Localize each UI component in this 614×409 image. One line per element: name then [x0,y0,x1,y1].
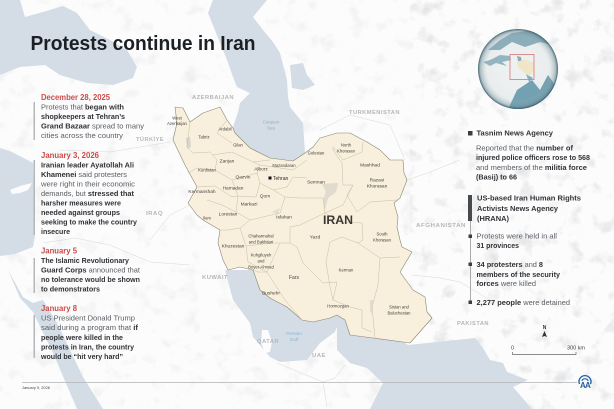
timeline entry: January 8 [34,304,139,361]
panel: HRANA: (HRANA) [477,214,509,223]
timeline entry: January 3, 2026 [34,151,138,236]
province labels: Kohgiluyeh [251,252,272,258]
timeline entry: January 8: protests in Iran, the country [41,342,135,352]
fact: killed [468,260,561,288]
panel: Tasnim News Agency [468,128,590,182]
timeline entry: January 5: to demonstrators [41,284,100,294]
panel: Tasnim News Agency: Reported that the number of [476,144,574,152]
timeline entry: January 8: said during a program that if [41,323,139,332]
fact: provinces: Protests were held in all [476,232,557,240]
province labels: Mazandaran [272,163,296,168]
province labels: Khuzestan [222,244,245,250]
title: Protests continue in Iran [30,33,256,55]
province labels: Hamadan [223,186,244,192]
Iran landmass [173,107,432,343]
province labels: Mashhad [360,162,380,168]
timeline entry: January 5: The Islamic Revolutionary [41,256,130,265]
heading bar [468,195,472,221]
water: Red Sea [8,270,103,409]
province labels: and [258,258,265,264]
footer rule [22,381,577,384]
water: Black Sea [0,0,137,85]
north arrow: N [543,325,547,331]
timeline entry: December 28, 2025: Protests that began with [41,102,124,112]
globe locator box [510,54,534,80]
water: Persian Gulf and Gulf of Oman [225,270,532,409]
timeline entry: December 28, 2025: Grand Bazaar spread to many [41,122,144,130]
timeline entry: January 3, 2026: Iranian leader Ayatollah Ali [41,160,134,170]
country label: Iran: IRAN [323,213,353,227]
timeline entry: January 3, 2026: needed against groups [41,208,120,217]
timeline entry: January 3, 2026: insecure [41,227,70,236]
timeline entry: January 5: January 5 [41,246,78,256]
neighbouring country labels: TÜRKİYE [136,136,164,143]
province labels: Kerman [339,268,354,272]
panel: HRANA [468,194,581,307]
locator globe [478,29,560,114]
province labels: West [172,116,183,120]
province labels: Fars [289,275,300,281]
province labels: Ardabil [218,126,232,132]
neighbouring country labels: UAE [312,353,326,359]
timeline entry: December 28, 2025: shopkeepers at Tehran’s [41,112,125,121]
water label: Caspian Sea: Caspian [263,120,280,124]
terrain patches [186,137,373,313]
scale bar: 300 km [567,346,585,352]
province borders [187,120,400,338]
province labels: Razavi [370,178,384,184]
province labels: Baluchestan [387,310,411,316]
fact: provinces [468,232,557,250]
neighbouring country labels: AZERBAIJAN [192,95,234,101]
timeline entry: January 8: would be “hit very hard” [40,352,123,361]
panel: HRANA: Activists News Agency [477,204,559,213]
province labels: Qom [260,194,270,200]
timeline entry: January 3, 2026: seeking to make the country [41,218,138,226]
timeline entry: January 8: people were killed in the [41,333,123,342]
province labels [167,116,411,316]
province labels: Sistan and [389,304,410,310]
timeline entry: January 3, 2026: demands, but stressed that [41,189,135,198]
province labels: South [377,232,388,236]
province labels: Chaharmahal [248,234,274,238]
panel: timeline [34,93,144,361]
date: January 9, 2026 [22,385,50,390]
timeline entry: January 3, 2026: Khamenei said protesters [41,170,127,179]
map: Iran [167,107,432,343]
water: Caspian Sea [208,0,305,165]
province labels: Khorasan [367,184,388,190]
globe shading [478,29,558,109]
water label: Persian Gulf: Gulf [290,337,299,342]
province labels: Markazi [241,202,257,208]
timeline entry: December 28, 2025 [34,93,144,140]
province labels: North [341,142,352,148]
logo: AA: AA [580,381,591,390]
timeline entry: December 28, 2025: December 28, 2025 [41,93,111,102]
globe sea areas [509,75,554,109]
fact: killed: members of the security [476,270,561,279]
panel: Tasnim News Agency: and members of the militia force [476,163,587,172]
capital marker: Tehran: Tehran [273,176,289,182]
province labels: Qazvin [236,174,251,180]
fact: killed: 34 protesters and 8 [476,260,543,269]
province labels: Kermanshah [188,189,216,195]
province labels: Semnan [307,180,325,186]
scale bar: 0 [511,346,514,352]
north arrow [542,325,547,337]
fact: provinces: 31 provinces [476,241,519,250]
fact: detained: 2,277 people were detained [476,298,570,307]
neighbouring country labels: PAKISTAN [457,321,489,327]
timeline entry: January 3, 2026: were right in their economic [40,180,135,188]
globe Iran highlight [517,59,534,76]
water label: Persian Gulf: Persian [286,331,302,336]
province labels: Lorestan [219,212,238,218]
marker square [468,131,472,136]
timeline entry: January 5: no tolerance would be shown [41,275,140,284]
neighbouring country labels: QATAR [257,339,279,345]
province labels: and Bakhtiari [249,240,273,244]
province labels: Ilam [203,216,211,220]
timeline entry: January 8: January 8 [41,304,78,313]
water: Mediterranean Sea [0,148,35,256]
province labels: Boyer-Ahmad [248,264,274,270]
panel: Tasnim News Agency: (Basij) to 66 [476,172,517,182]
panel: Tasnim News Agency: injured police officers rose to 568 [476,153,590,162]
timeline entry: January 3, 2026: harsher measures were [41,198,121,208]
neighbouring country labels: KUWAIT [202,275,228,281]
timeline entry: January 5: Guard Corps announced that [41,266,140,274]
province labels: Tabriz [198,134,210,140]
province labels: Kurdistan [198,168,217,172]
province labels: Khorasan [373,238,392,242]
province labels: Khorasan [337,148,356,154]
panel: Tasnim News Agency: Tasnim News Agency [476,128,554,138]
timeline entry: January 8: US President Donald Trump [41,314,135,322]
province labels: Isfahan [276,214,292,220]
timeline entry: December 28, 2025: cities across the country [41,131,123,140]
water label: Persian Gulf [286,331,302,342]
timeline entry: January 5 [34,246,140,294]
neighbouring country labels: TURKMENISTAN [349,110,400,116]
neighbouring country labels [136,95,489,359]
neighbouring country labels: AFGHANISTAN [416,223,466,229]
province labels: Bushehr [262,290,280,296]
island: Cyprus [10,183,32,194]
water label: Caspian Sea [263,120,280,130]
province labels: Alborz [254,166,268,172]
province labels: Zanjan [220,158,235,164]
scale bar [511,346,585,354]
water label: Caspian Sea: Sea [267,126,276,130]
timeline entry: January 3, 2026: January 3, 2026 [41,151,100,160]
province labels: Golestan [308,150,325,156]
panel: HRANA: US-based Iran Human Rights [477,194,581,202]
province labels: Hormozgan [327,304,349,308]
fact: killed: forces were killed [476,279,536,288]
province labels: Gilan [233,142,244,148]
water: Garabogaz lagoon [290,63,315,90]
province labels: Yazd [310,234,321,240]
logo: AA [579,376,591,390]
island: Qatar [261,330,272,353]
neighbouring country labels: IRAQ [146,211,163,217]
province labels: Azerbaijan [167,121,188,126]
